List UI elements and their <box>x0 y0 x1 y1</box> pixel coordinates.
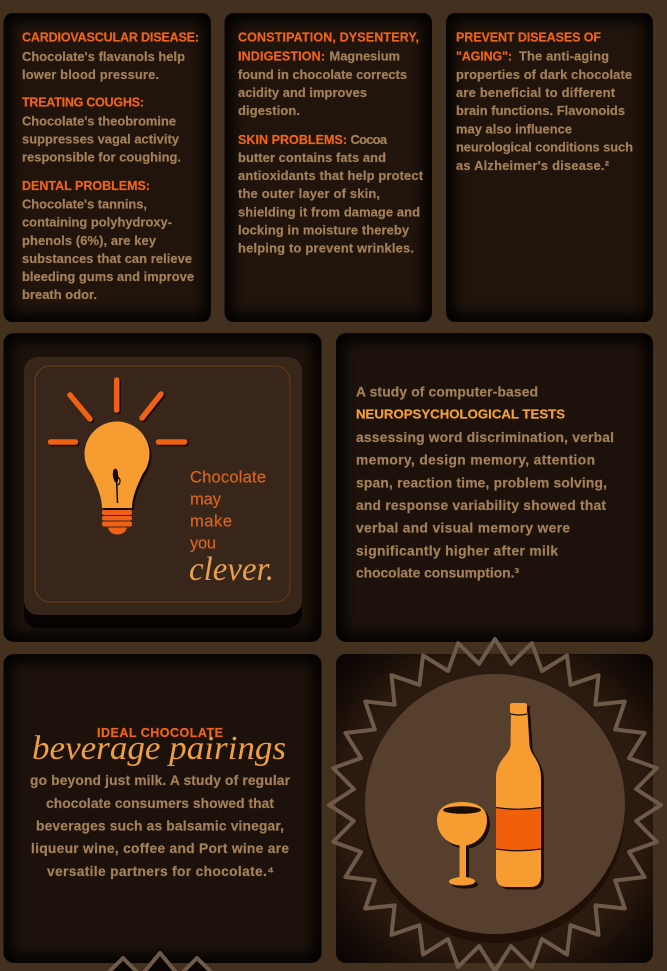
text: chocolate may make you: may <box>190 490 222 508</box>
text: anti-aging: may also influence <box>456 122 572 136</box>
text: theobromine <box>22 114 181 164</box>
text: flavanols: Chocolate's flavanols help <box>22 49 185 64</box>
heading: prevent diseases of aging: PREVENT DISEASES OF <box>456 30 601 44</box>
heading: constipation: CONSTIPATION, DYSENTERY, <box>238 30 419 44</box>
icon: light rays <box>50 380 186 444</box>
icon: light bulb <box>84 421 152 534</box>
text: magnesium <box>238 48 407 118</box>
card <box>24 357 302 615</box>
text: theobromine: Chocolate's theobromine <box>22 114 176 128</box>
card border <box>35 366 290 602</box>
text: theobromine: suppresses vagal activity <box>22 132 180 146</box>
text: study details: span, reaction time, problem solving, <box>356 476 607 490</box>
text: flavanols <box>22 49 185 82</box>
text: pairings body: chocolate consumers showed that <box>46 796 274 811</box>
text: tannins: substances that can relieve <box>22 251 192 266</box>
seal: circle <box>365 674 625 943</box>
heading: neuropsychological tests: NEUROPSYCHOLOGICAL TESTS <box>356 406 565 422</box>
text: clever: clever. <box>189 551 274 588</box>
text: anti-aging: neurological conditions such <box>456 140 633 154</box>
panel: wine <box>336 654 653 963</box>
text: anti-aging: The anti-aging <box>519 48 609 64</box>
panel: aging <box>446 13 653 322</box>
heading: prevent diseases of aging: "AGING": <box>456 50 512 64</box>
text: chocolate may make you: make <box>190 512 232 530</box>
text: flavanols: lower blood pressure. <box>22 67 159 82</box>
panel: clever lightbulb <box>4 333 322 642</box>
text: chocolate may make you <box>190 468 266 552</box>
text: cocoa butter: the outer layer of skin, <box>238 186 380 201</box>
text: cocoa butter: locking in moisture thereby <box>238 222 410 238</box>
text: pairings body: go beyond just milk. A study of regular <box>30 773 291 788</box>
heading: dental problems: DENTAL PROBLEMS: <box>22 179 150 193</box>
text: cocoa butter: antioxidants that help protect <box>238 168 424 183</box>
text: study details: significantly higher after milk <box>356 544 558 558</box>
text: study details: chocolate consumption.³ <box>356 566 519 580</box>
panel: beverage pairings <box>4 654 322 963</box>
text: pairings body: versatile partners for chocolate.⁴ <box>47 864 274 879</box>
text: anti-aging: are beneficial to different <box>456 85 616 100</box>
text: study intro: A study of computer-based <box>356 384 538 400</box>
text: anti-aging <box>456 48 633 173</box>
text: study details: assessing word discrimination, verbal <box>356 430 614 445</box>
text: magnesium: digestion. <box>238 103 300 118</box>
text: magnesium: Magnesium <box>330 48 400 64</box>
heading: prevent diseases of aging <box>456 30 601 64</box>
text: theobromine: responsible for coughing. <box>22 150 181 164</box>
heading: ideal chocolate: IDEAL CHOCOLATE <box>97 726 223 740</box>
text: anti-aging: brain functions. Flavonoids <box>456 103 625 118</box>
text: study details: verbal and visual memory were <box>356 520 570 536</box>
text: tannins: breath odor. <box>22 287 97 302</box>
text: study details: memory, design memory, attention <box>356 452 595 468</box>
heading: skin problems: SKIN PROBLEMS: <box>238 133 347 147</box>
text: cocoa butter: butter contains fats and <box>238 150 386 165</box>
text: tannins: Chocolate's tannins, <box>22 196 147 212</box>
heading: indigestion: INDIGESTION: <box>238 50 325 64</box>
seal: zigzag outline <box>329 639 661 971</box>
text: anti-aging: as Alzheimer's disease.² <box>456 158 610 173</box>
heading: treating coughs: TREATING COUGHS: <box>22 96 144 110</box>
text: tannins: containing polyhydroxy- <box>22 214 172 230</box>
text: anti-aging: properties of dark chocolate <box>456 67 632 82</box>
icon: wine glass <box>437 802 490 888</box>
text: pairings body <box>30 773 291 879</box>
text: study details: and response variability showed that <box>356 498 606 513</box>
text: pairings body: beverages such as balsamic vinegar, <box>36 818 284 834</box>
text: pairings body: liqueur wine, coffee and Port wine are <box>31 841 289 856</box>
text: cocoa butter: shielding it from damage and <box>238 204 420 220</box>
heading: beverage pairings: beverage pairings <box>32 730 286 767</box>
panel: cardiovascular, coughs, dental <box>4 13 211 322</box>
next seal: peeking at bottom edge <box>105 953 215 971</box>
text: cocoa butter <box>238 132 424 256</box>
text: tannins <box>22 196 194 302</box>
text: cocoa butter: helping to prevent wrinkles. <box>238 240 414 256</box>
panel: digestion and skin <box>224 13 432 322</box>
card shadow <box>24 370 302 628</box>
panel: neuropsychological tests <box>336 333 653 642</box>
text: tannins: phenols (6%), are key <box>22 233 157 248</box>
text: tannins: bleeding gums and improve <box>22 269 194 284</box>
text: chocolate may make you: Chocolate <box>190 468 266 486</box>
text: chocolate may make you: you <box>190 534 216 552</box>
heading: cardiovascular disease: CARDIOVASCULAR DISEASE: <box>22 30 199 44</box>
icon: wine bottle <box>496 703 544 890</box>
text: study details <box>356 430 614 580</box>
text: magnesium: found in chocolate corrects <box>238 67 407 82</box>
text: cocoa butter: Cocoa <box>350 132 388 147</box>
text: magnesium: acidity and improves <box>238 85 367 100</box>
